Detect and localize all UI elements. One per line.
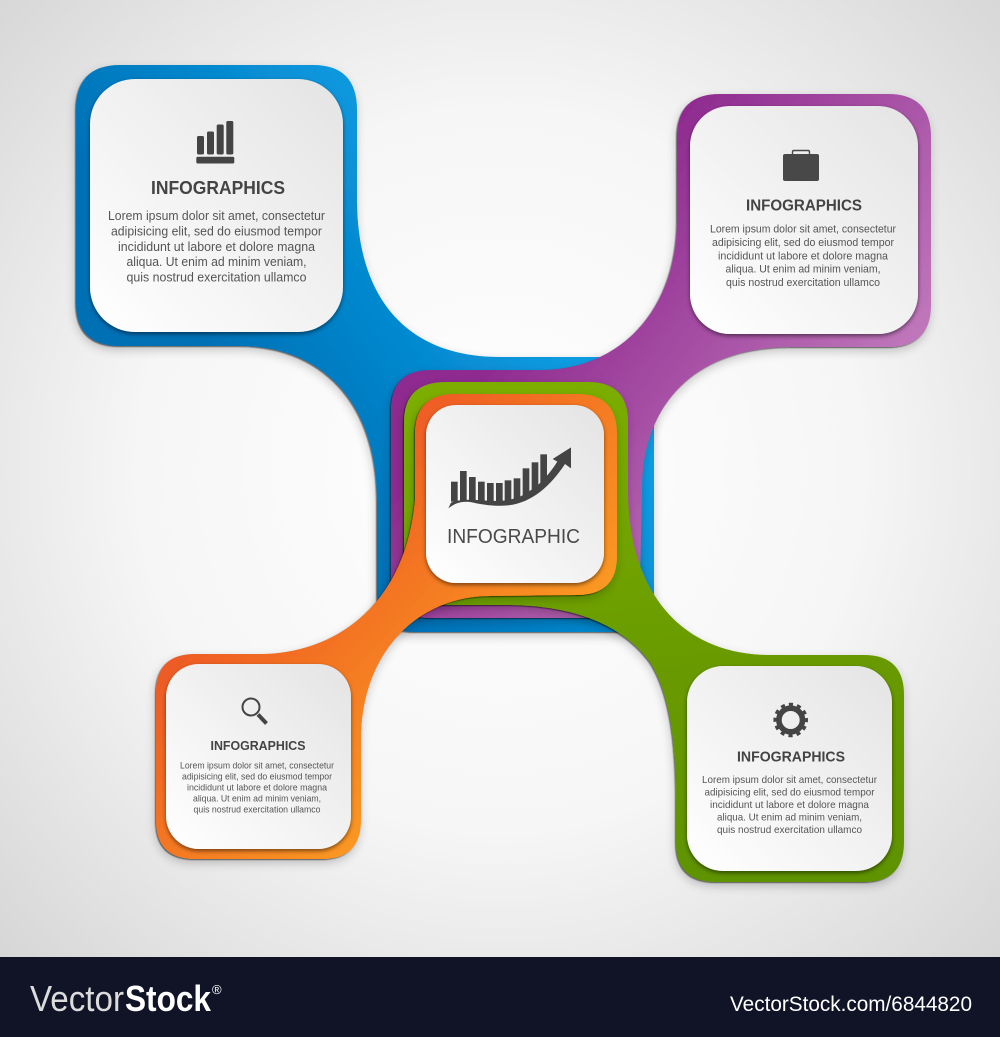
heading: INFOGRAPHICS bbox=[737, 748, 845, 766]
footer bar bbox=[0, 957, 1000, 1037]
body text: incididunt ut labore et dolore magna bbox=[187, 782, 328, 792]
body text: Lorem ipsum dolor sit amet, consectetur bbox=[702, 774, 877, 786]
body text bbox=[710, 224, 896, 289]
orange connector shape bbox=[156, 394, 617, 859]
icon: magnifier bbox=[242, 698, 266, 724]
footer logo bbox=[30, 978, 212, 1019]
purple connector shape bbox=[391, 94, 931, 618]
body text: quis nostrud exercitation ullamco bbox=[717, 824, 862, 836]
icon: gear bbox=[774, 703, 808, 737]
body text: Lorem ipsum dolor sit amet, consectetur bbox=[108, 209, 325, 223]
body text bbox=[180, 760, 334, 814]
body text: aliqua. Ut enim ad minim veniam, bbox=[717, 812, 862, 824]
icon: growth chart with arrow bbox=[448, 447, 571, 508]
body text: quis nostrud exercitation ullamco bbox=[194, 804, 320, 814]
icon: briefcase bbox=[783, 150, 819, 181]
body text: Lorem ipsum dolor sit amet, consectetur bbox=[180, 760, 334, 770]
blue connector shape bbox=[76, 65, 654, 632]
blue card bbox=[90, 79, 343, 332]
panel: orange bbox=[156, 394, 617, 859]
center card bbox=[426, 405, 604, 583]
body text: adipisicing elit, sed do eiusmod tempor bbox=[704, 786, 875, 798]
panel: purple bbox=[391, 94, 931, 618]
center label: INFOGRAPHIC bbox=[447, 526, 580, 548]
body text: adipisicing elit, sed do eiusmod tempor bbox=[111, 224, 322, 238]
body text bbox=[108, 209, 325, 284]
orange card bbox=[166, 664, 351, 849]
body text: adipisicing elit, sed do eiusmod tempor bbox=[712, 237, 894, 249]
heading: INFOGRAPHICS bbox=[151, 178, 285, 198]
body text: aliqua. Ut enim ad minim veniam, bbox=[193, 794, 321, 804]
body text: incididunt ut labore et dolore magna bbox=[710, 799, 869, 811]
panel: blue bbox=[76, 65, 654, 632]
icon: bar chart bbox=[196, 121, 234, 164]
body text: aliqua. Ut enim ad minim veniam, bbox=[126, 255, 306, 269]
footer logo: Stock bbox=[125, 978, 212, 1019]
body text: adipisicing elit, sed do eiusmod tempor bbox=[182, 772, 332, 782]
body text: quis nostrud exercitation ullamco bbox=[126, 270, 307, 284]
registered mark: ® bbox=[212, 982, 222, 997]
body text: incididunt ut labore et dolore magna bbox=[718, 250, 889, 262]
footer image id: VectorStock.com/6844820 bbox=[730, 993, 972, 1016]
body text: quis nostrud exercitation ullamco bbox=[726, 277, 880, 289]
body text: Lorem ipsum dolor sit amet, consectetur bbox=[710, 224, 896, 236]
green card bbox=[687, 666, 892, 871]
body text: incididunt ut labore et dolore magna bbox=[118, 240, 315, 254]
panel: center bbox=[426, 405, 604, 583]
body text bbox=[702, 774, 877, 836]
purple card bbox=[690, 106, 918, 334]
heading: INFOGRAPHICS bbox=[210, 738, 306, 753]
panel: green bbox=[404, 382, 904, 882]
heading: INFOGRAPHICS bbox=[746, 198, 862, 214]
green connector shape bbox=[404, 382, 904, 882]
body text: aliqua. Ut enim ad minim veniam, bbox=[726, 264, 880, 276]
footer logo: Vector bbox=[30, 978, 124, 1019]
